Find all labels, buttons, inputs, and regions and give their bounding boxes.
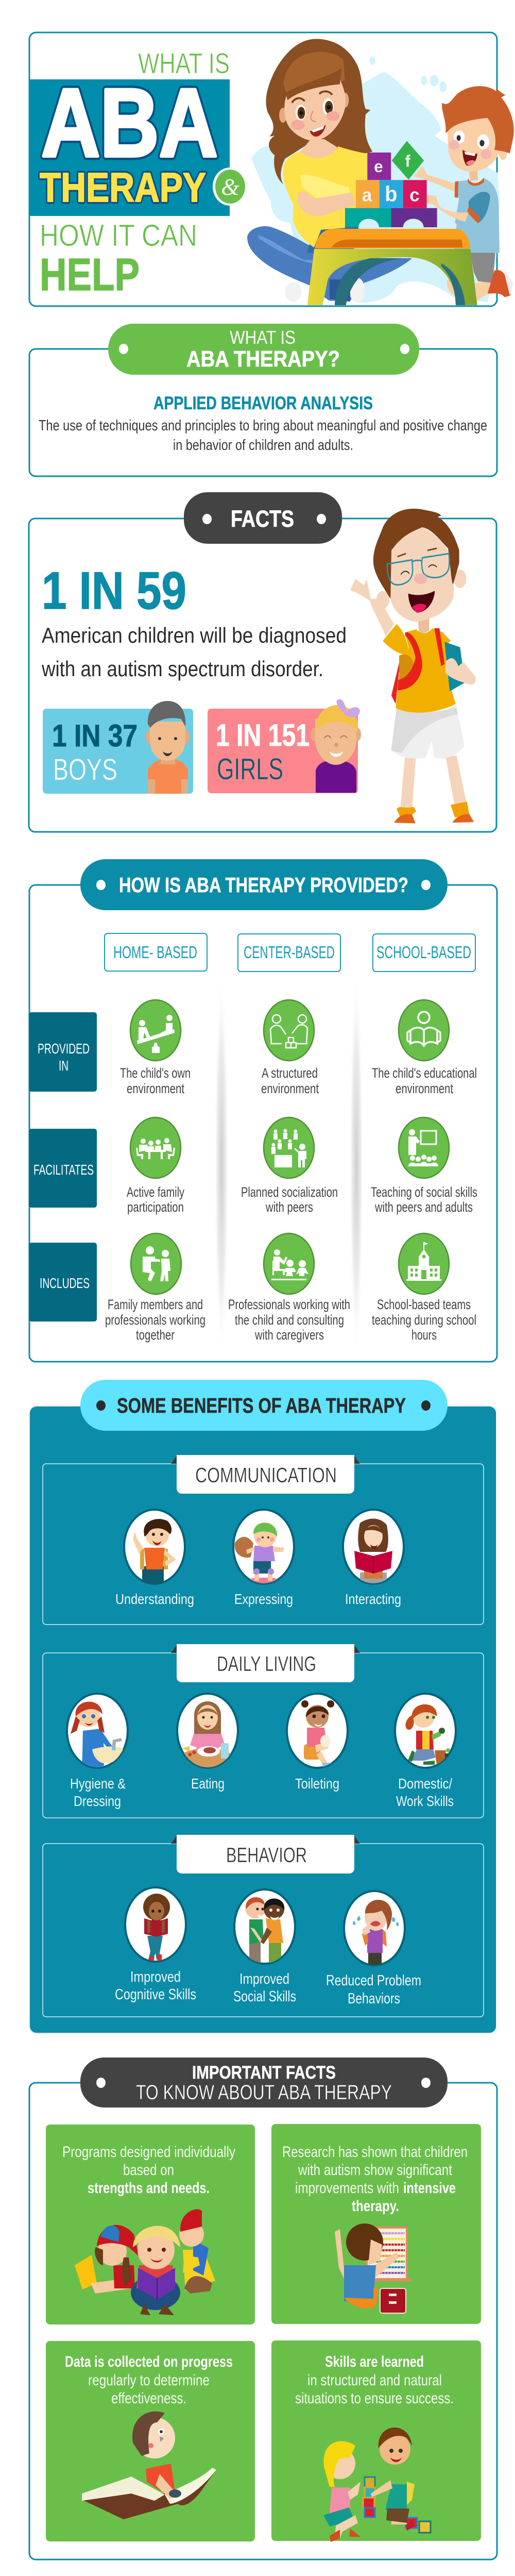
icon: children with blocks [264,1000,314,1061]
subheading: applied behavior analysis: APPLIED BEHAVIOR ANALYSIS [153,393,373,413]
icon: professional and children [264,1233,314,1294]
table [307,229,477,305]
cell text: provided in: The child's own [120,1065,191,1081]
column header: school-based: SCHOOL-BASED [376,943,471,962]
caption: behavior skills: Cognitive Skills [115,1986,196,2003]
heading: how it can: HOW IT CAN [40,219,197,253]
icon: two people walking [131,1233,181,1294]
card: individual programs [46,2125,255,2324]
definition text [39,417,487,454]
column header: home-based [105,933,207,971]
card: boys [43,701,193,794]
panel: important facts [29,2058,497,2560]
portrait: domestic work [395,1694,456,1768]
badge: some benefits [80,1380,448,1431]
caption: behavior skills: Improved [239,1971,289,1987]
panel: benefits [29,1380,496,2034]
label: behavior: BEHAVIOR [226,1843,307,1867]
label: daily living [177,1644,354,1682]
column header: center-based: CENTER-BASED [244,943,335,962]
row label: facilitates: FACILITATES [33,1162,94,1178]
illustration: woman and boy with blocks [247,39,514,305]
row label: provided in: PROVIDED [38,1041,90,1057]
illustration: boy on open book [82,2412,216,2519]
portrait: hygiene [67,1694,128,1772]
caption: daily living skills: Hygiene & [70,1776,126,1792]
cell text: facilitates: Planned socialization [241,1184,338,1200]
card text: intensive [403,2180,456,2197]
illustration: three children reading [75,2209,215,2315]
card text [282,2144,468,2215]
card text: Data is collected on progress [65,2353,233,2370]
ampersand badge: & [221,174,239,200]
teal title block: THERAPY [40,164,206,210]
badge: facts: FACTS [231,506,294,532]
caption: daily living skills: Toileting [295,1776,339,1792]
caption: daily living skills: Work Skills [396,1793,454,1809]
caption: behavior skills [115,1969,421,2007]
label: communication [177,1455,354,1494]
card text: situations to ensure success. [295,2390,454,2407]
icon: seesaw [130,1000,181,1061]
card: boys: 1 IN 37 [52,718,138,753]
teal title block: THERAPY [40,164,206,210]
caption: communication skills: Interacting [345,1591,401,1607]
blocks: b [385,182,398,206]
teal title block: ABA [41,69,218,177]
cell text: includes [105,1297,476,1343]
cell text: provided in: environment [261,1081,319,1096]
panel: how is aba therapy provided [29,859,497,1362]
statistic description: with an autism spectrum disorder. [41,657,323,681]
portrait: reduced problem behaviors [344,1891,405,1965]
cell text: facilitates: with peers and adults [374,1199,473,1215]
cell text: provided in: environment [127,1081,184,1096]
portrait: eating [176,1693,239,1769]
portrait: toileting [287,1694,348,1768]
cell text: facilitates [127,1184,477,1215]
illustration: boy with abacus [335,2223,411,2313]
cell text: includes: School-based teams [377,1297,471,1312]
card text: based on [123,2162,174,2179]
illustration: two children with blocks [323,2428,431,2542]
section: behavior [43,1835,484,2017]
card: data collected [46,2341,255,2541]
card: girls: 1 IN 151 [216,718,310,752]
card text: effectiveness. [111,2390,186,2407]
icon: reader with book [399,1000,449,1061]
cell text: includes: teaching during school [372,1312,476,1328]
portrait: social skills [234,1889,295,1964]
card: intensive therapy [271,2124,481,2324]
badge: important facts: TO KNOW ABOUT ABA THERAPY [136,2081,392,2104]
card text [62,2144,235,2197]
cell text: includes: professionals working [105,1312,205,1328]
icon: boy portrait [146,701,190,794]
portrait: understanding [124,1510,185,1587]
row label: provided in [29,1012,97,1092]
woman [247,39,412,303]
portrait: cognitive skills [125,1887,186,1962]
badge: what is aba therapy [108,324,419,375]
teal title block: ABA [41,69,218,177]
column header: center-based [238,934,340,972]
label: behavior [177,1835,354,1874]
caption: communication skills: Understanding [115,1591,194,1607]
card text [295,2353,454,2407]
caption: daily living skills: Domestic/ [398,1776,452,1792]
card: boys: BOYS [53,753,117,787]
blocks: a [362,185,373,206]
row label: facilitates [29,1129,97,1208]
cell text: includes: the child and consulting [235,1312,344,1328]
card text: with autism show significant [298,2162,453,2179]
icon: teacher and board [399,1117,449,1178]
card text [65,2353,233,2407]
portrait: expressing [233,1510,294,1586]
column header: school-based [373,934,475,972]
cell text: includes: Family members and [108,1297,203,1312]
cell text: provided in [120,1065,477,1096]
caption: daily living skills [70,1776,454,1809]
label: communication: COMMUNICATION [195,1463,337,1487]
cell text: provided in: The child's educational [372,1065,477,1081]
badge: what is aba therapy: ABA THERAPY? [186,346,340,372]
badge: how is aba therapy provided [80,859,448,910]
card text: regularly to determine [88,2372,210,2389]
cell text: facilitates: Teaching of social skills [371,1184,477,1200]
column header: home-based: HOME- BASED [113,943,197,962]
heading: what is: WHAT IS [138,47,230,79]
badge: important facts [80,2058,448,2107]
panel: what is aba therapy [29,324,497,476]
badge: important facts: IMPORTANT FACTS [192,2063,336,2083]
section: communication [43,1455,484,1625]
blocks: f [405,152,410,171]
boy kneeling [414,86,514,300]
card text: Programs designed individually [62,2144,235,2161]
caption: communication skills [115,1591,401,1607]
card text: in structured and natural [307,2372,442,2389]
heading: help: HELP [40,249,140,300]
definition text: in behavior of children and adults. [173,437,353,454]
statistic description: American children will be diagnosed [42,623,347,647]
cell text: provided in: A structured [262,1065,318,1081]
label: daily living: DAILY LIVING [217,1652,316,1676]
portrait: interacting [343,1510,404,1584]
badge: how is aba therapy provided: HOW IS ABA THERAPY PROVIDED? [119,873,408,897]
cell text: facilitates: Active family [127,1184,184,1200]
card text: improvements with [295,2180,399,2197]
cell text: facilitates: participation [127,1199,184,1215]
cell text: includes: Professionals working with [228,1297,350,1312]
statistic description [41,623,347,681]
icon: classroom peers [264,1117,314,1178]
card text: therapy. [352,2198,399,2215]
caption: communication skills: Expressing [234,1591,293,1607]
panel: hero title [29,32,514,306]
icon: school building [399,1233,449,1294]
panel: facts [29,492,496,832]
card: skills learned [271,2340,481,2542]
badge: facts [184,492,342,544]
caption: behavior skills: Reduced Problem [326,1972,421,1989]
caption: daily living skills: Dressing [74,1793,121,1809]
cell text: includes: together [136,1327,175,1343]
blocks: e [374,157,383,176]
caption: behavior skills: Behaviors [348,1990,400,2007]
card text: strengths and needs. [88,2180,210,2197]
card: girls [208,699,361,793]
cell text: facilitates: with peers [265,1199,313,1215]
card text: Research has shown that children [282,2144,468,2161]
statistic: 1 in 59: 1 IN 59 [42,561,186,620]
badge: some benefits: SOME BENEFITS OF ABA THERAPY [117,1394,406,1417]
cell text: provided in: environment [396,1081,453,1096]
blocks: c [409,185,420,206]
badge: what is aba therapy: WHAT IS [230,327,296,348]
row label: includes: INCLUDES [40,1275,90,1291]
teal title block [29,69,230,216]
caption: behavior skills: Social Skills [233,1988,296,2005]
illustration: waving boy [350,509,476,824]
caption: behavior skills: Improved [130,1969,181,1985]
ampersand badge [213,168,247,206]
caption: daily living skills: Eating [191,1776,225,1792]
cell text: includes: hours [411,1327,437,1343]
blocks [345,141,437,236]
section: daily living [43,1644,484,1818]
card: girls: GIRLS [217,752,283,786]
card text: Skills are learned [325,2353,424,2370]
icon: girl portrait [311,699,361,793]
icon: family at table [130,1117,181,1178]
row label: includes [29,1243,97,1322]
row label: provided in: IN [59,1058,68,1074]
cell text: includes: with caregivers [254,1327,324,1343]
